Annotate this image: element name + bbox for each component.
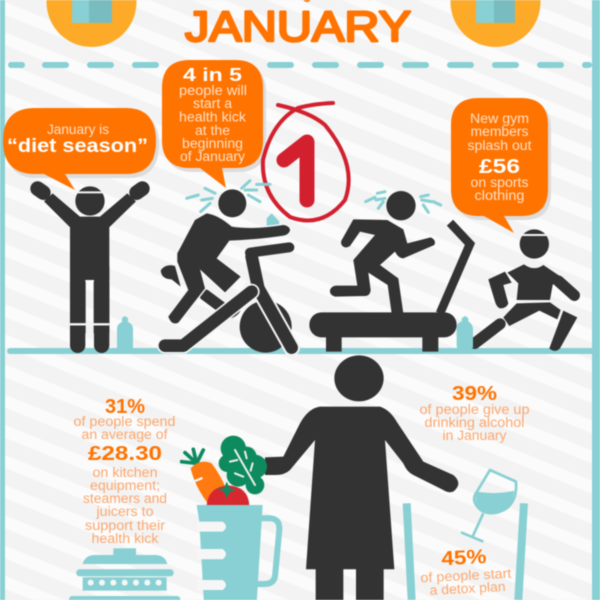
text: 31 percent kitchen equipment: support their <box>85 518 166 533</box>
icon: left book badge <box>46 0 136 47</box>
figure: stretching man <box>475 229 577 351</box>
callout: 4 in 5: health kick <box>179 110 246 124</box>
text: 31 percent kitchen equipment: 31% <box>105 396 145 418</box>
text: 39 percent give up alcohol: 39% <box>452 383 497 405</box>
text: 31 percent kitchen equipment: £28.30 <box>88 443 162 465</box>
callout: gym clothing spend: New gym <box>470 111 529 126</box>
icon: vegetables <box>182 436 267 505</box>
callout: gym clothing spend: members <box>470 124 529 139</box>
icon: water bottle left <box>117 316 133 348</box>
callout: gym clothing spend: on sports <box>470 175 529 190</box>
callout: 4 in 5: people will <box>179 83 247 98</box>
callout: 4 in 5 <box>162 60 266 188</box>
callout: diet season <box>3 108 159 190</box>
icon: right book badge <box>450 0 540 47</box>
text: 45 percent detox plan: of people start <box>420 566 512 585</box>
callout: gym clothing spend: £56 <box>479 156 520 178</box>
callout: gym clothing spend <box>451 98 551 233</box>
icon: water bottle right <box>457 316 473 348</box>
icon: drinking glass with wine <box>407 470 524 600</box>
shelf <box>10 348 592 354</box>
title: JANUARY <box>185 3 411 51</box>
text: 31 percent kitchen equipment: health kick <box>92 531 159 546</box>
text: 31 percent kitchen equipment: steamers and <box>83 491 167 506</box>
callout: 4 in 5: start a <box>193 96 233 111</box>
callout: diet season: “diet season” <box>7 136 148 157</box>
text: 31 percent kitchen equipment: on kitchen <box>92 465 158 480</box>
callout: 4 in 5: of January <box>180 149 245 164</box>
text: 39 percent give up alcohol: of people give up <box>420 402 530 417</box>
callout: 4 in 5: beginning <box>182 136 243 151</box>
figure: exercise bike rider <box>161 181 292 353</box>
text: 39 percent give up alcohol: drinking alcohol <box>424 415 524 430</box>
text: 31 percent kitchen equipment: equipment; <box>90 478 160 493</box>
callout: 4 in 5: at the <box>195 123 230 138</box>
text: 31 percent kitchen equipment <box>74 396 176 546</box>
icon: blender jug <box>197 505 279 600</box>
icon: red circled number one <box>263 103 349 221</box>
callout: 4 in 5: 4 in 5 <box>183 65 242 85</box>
text: 45 percent detox plan: 45% <box>441 546 487 570</box>
text: 31 percent kitchen equipment: an average of <box>82 427 168 442</box>
icon: steamer pot <box>69 548 180 600</box>
callout: gym clothing spend: clothing <box>474 188 524 203</box>
figure: woman at blender <box>265 355 458 600</box>
text: 31 percent kitchen equipment: of people spend <box>74 414 176 429</box>
figure: arms raised <box>38 186 142 345</box>
text: 39 percent give up alcohol <box>420 383 530 443</box>
callout: diet season: January is <box>47 122 109 137</box>
text: 45 percent detox plan <box>419 545 513 598</box>
figure: treadmill runner <box>309 191 472 352</box>
text: 45 percent detox plan: a detox plan <box>429 579 506 598</box>
callout: gym clothing spend: splash out <box>468 138 532 153</box>
text: 39 percent give up alcohol: in January <box>442 428 507 443</box>
text: 31 percent kitchen equipment: juicers to <box>95 504 154 519</box>
